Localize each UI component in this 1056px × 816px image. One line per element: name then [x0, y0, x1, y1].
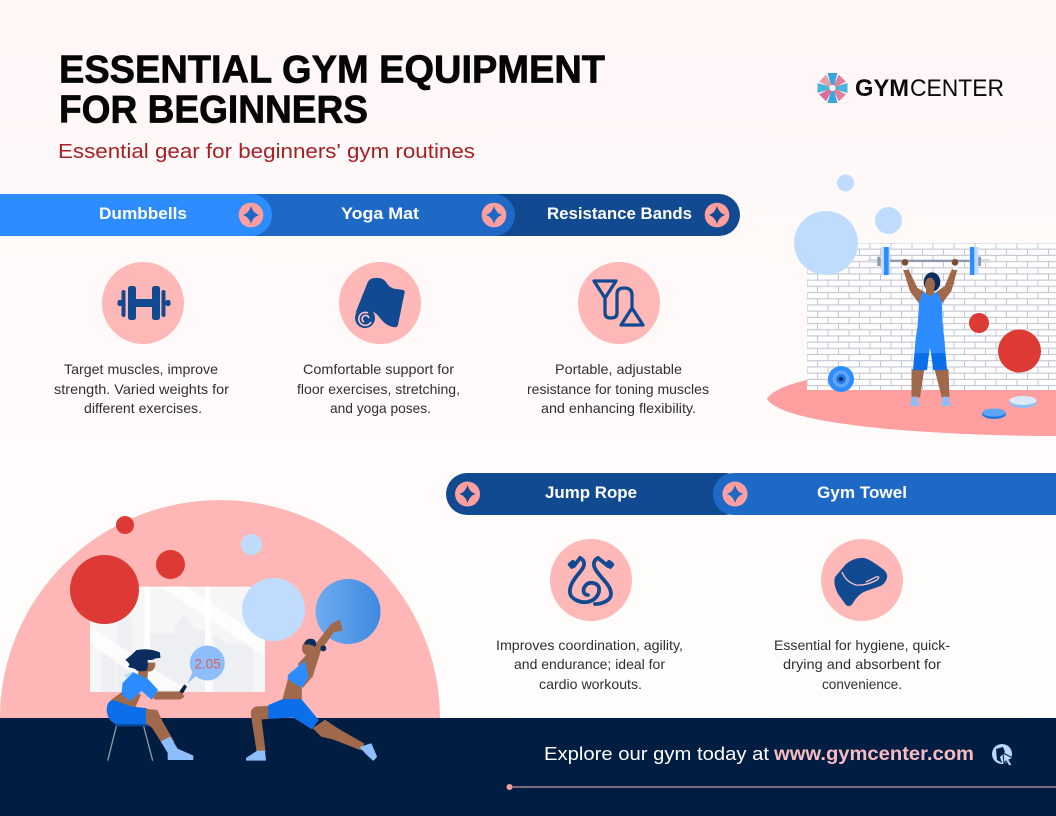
icon: logo burst — [818, 73, 848, 103]
text: jump rope description: and endurance; ideal for — [514, 657, 665, 672]
item: resistance bands — [527, 262, 709, 416]
footer call to action: www.gymcenter.com — [773, 744, 974, 765]
text: dumbbells description: Target muscles, improve — [64, 362, 218, 377]
title — [59, 48, 605, 132]
logo wordmark: CENTER — [910, 75, 1004, 102]
label: Dumbbells: Dumbbells — [99, 205, 187, 223]
text: resistance bands description: Portable, adjustable — [555, 362, 682, 377]
icon: star badge 1 — [239, 203, 263, 227]
footer rule with dot — [506, 784, 1056, 790]
text: towel description: Essential for hygiene, quick- — [774, 638, 950, 653]
icon: jump rope — [550, 539, 632, 621]
logo: GymCenter — [818, 73, 1004, 103]
decorative circles — [70, 516, 380, 644]
icon: dumbbell — [102, 262, 184, 344]
lunging woman with ball — [247, 621, 376, 760]
text: towel description — [774, 638, 950, 692]
weightlifter figure — [868, 247, 990, 405]
title: ESSENTIAL GYM EQUIPMENT — [59, 48, 605, 92]
illustration: semicircle backdrop with two women — [0, 500, 1056, 816]
label: Yoga Mat: Yoga Mat — [341, 205, 420, 223]
icon: star badge 2 — [482, 203, 506, 227]
text: yoga mat description — [297, 362, 460, 416]
icon: star badge 4 — [455, 482, 480, 506]
icon: towel — [821, 539, 903, 621]
label: Gym Towel: Gym Towel — [817, 484, 907, 502]
title: FOR BEGINNERS — [59, 88, 368, 132]
label: Resistance Bands: Resistance Bands — [547, 205, 692, 223]
pink semicircle — [0, 500, 440, 718]
item: dumbbells — [54, 262, 229, 416]
text: resistance bands description — [527, 362, 709, 416]
text: resistance bands description: and enhancing flexibility. — [541, 401, 696, 416]
icon: resistance band — [578, 262, 660, 344]
header band: top three items — [0, 194, 740, 236]
subtitle: Essential gear for beginners' gym routines — [58, 140, 475, 163]
footer call to action: Explore our gym today at — [544, 743, 769, 764]
item: jump rope — [496, 539, 683, 692]
icon: globe with cursor — [992, 744, 1013, 766]
item: yoga mat — [297, 262, 460, 416]
icon: rolled mat — [339, 262, 421, 344]
icon: star badge 3 — [705, 203, 729, 227]
decorative circles — [794, 174, 1041, 372]
icon: star badge 5 — [722, 482, 748, 506]
footer call to action — [544, 743, 974, 765]
illustration: weightlifter at brick wall — [767, 174, 1056, 436]
floor ellipse — [767, 362, 1056, 436]
text: towel description: drying and absorbent for — [783, 657, 941, 672]
text: jump rope description — [496, 638, 683, 692]
text: dumbbells description: different exercises. — [84, 401, 202, 416]
logo wordmark — [855, 75, 1004, 102]
text: jump rope description: Improves coordination, agility, — [496, 638, 683, 653]
weight plate on wall — [828, 366, 854, 392]
item: gym towel — [774, 539, 950, 692]
logo wordmark: GYM — [855, 75, 909, 102]
label: Jump Rope: Jump Rope — [545, 484, 637, 502]
header band: lower two items — [446, 473, 1056, 515]
text: resistance bands description: resistance for toning muscles — [527, 382, 709, 397]
window with skyline — [90, 587, 265, 692]
text: yoga mat description: and yoga poses. — [330, 401, 431, 416]
timer bubble — [188, 646, 225, 683]
text: jump rope description: cardio workouts. — [539, 677, 642, 692]
timer bubble: 2.05 — [194, 656, 221, 672]
text: towel description: convenience. — [822, 677, 902, 692]
footer band — [0, 718, 1056, 816]
text: dumbbells description — [54, 362, 229, 416]
seated woman with phone — [108, 650, 193, 761]
text: yoga mat description: floor exercises, stretching, — [297, 382, 460, 397]
text: yoga mat description: Comfortable support for — [303, 362, 454, 377]
weight plates on floor — [982, 396, 1037, 419]
brick wall — [807, 243, 1056, 390]
text: dumbbells description: strength. Varied weights for — [54, 382, 229, 397]
